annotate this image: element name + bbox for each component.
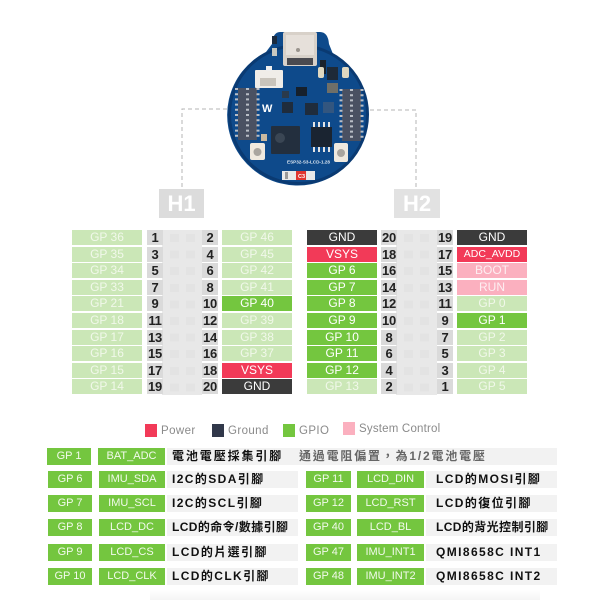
right pin numbers: 10 [203,296,217,311]
left pin numbers: 5 [151,263,159,278]
left pin header [236,88,258,140]
battery connector [255,66,283,88]
row: GP 7 [48,495,298,512]
right pin numbers: 5 [441,346,449,361]
right signal column: GP 42 [240,263,274,277]
row: GP 12 [306,495,557,512]
c3 marking: C3 [298,174,305,180]
small components [261,36,349,141]
right signal column: GP 40 [240,296,274,310]
right pin numbers [202,230,218,394]
right pin numbers: 15 [438,263,452,278]
left signal column: VSYS [326,247,358,261]
left pin numbers: 6 [385,346,393,361]
left pin numbers: 11 [148,313,162,328]
center connector strip [396,230,437,395]
esp32 chip [271,126,300,154]
center connector strip [162,230,202,395]
row: GP 40 [306,519,557,536]
left signal column [72,230,142,394]
right signal column: GP 46 [240,230,274,244]
right pin numbers: 18 [203,363,217,378]
left pin numbers: 2 [385,379,393,394]
right pin numbers: 4 [206,247,214,262]
left pin numbers [381,230,397,394]
right pin header [341,89,362,141]
row: GP 40: LCD_BL [370,521,411,533]
row: GP 10 [48,568,298,585]
right signal column: GP 4 [478,363,506,377]
left signal column: GP 6 [328,263,356,277]
row: GP 6: IMU_SDA [108,473,156,485]
right pin numbers: 17 [438,247,452,262]
right signal column: GND [479,230,505,244]
legend: power: Power [161,425,196,437]
row: GP 8: GP 8 [58,521,82,533]
left pin numbers: 4 [385,363,393,378]
right pin numbers: 14 [203,330,217,345]
left pin numbers: 17 [148,363,162,378]
row: GP 11: LCD_DIN [367,473,414,485]
row: GP 8: LCD的命令/數據引腳 [172,520,288,534]
right signal column: GP 5 [478,379,506,393]
row: GP 7: GP 7 [58,497,82,509]
left signal column [307,230,377,394]
board name: ESP32-S3-LCD-1.28 [287,160,330,164]
row: GP 40: LCD的背光控制引腳 [436,520,549,534]
row: GP 9: LCD的片選引腳 [172,545,268,559]
right button [334,143,348,162]
left pin numbers: 12 [382,296,396,311]
left signal column: GND [329,230,355,244]
row: GP 12: LCD_RST [365,497,416,509]
left button [250,143,265,160]
right signal column: GND [244,379,270,393]
right signal column: GP 38 [240,330,274,344]
left pin numbers: 10 [382,313,396,328]
H2 label: H2 [403,191,431,216]
right signal column: GP 41 [240,280,274,294]
left pin numbers: 8 [385,330,393,345]
row: GP 10: LCD的CLK引腳 [172,569,270,583]
right pin numbers: 8 [206,280,214,295]
H1 label: H1 [167,191,196,216]
c3 marking [282,171,315,180]
right pin numbers: 12 [203,313,217,328]
row: GP 47 [306,544,557,561]
H2 label [394,189,440,218]
left pin numbers: 16 [382,263,396,278]
row: GP 12: LCD的復位引腳 [436,496,532,510]
row: GP 48: IMU_INT2 [365,570,416,582]
row: GP 6: I2C的SDA引腳 [172,472,265,486]
right signal column [222,230,292,394]
left pin numbers [147,230,163,394]
left pin numbers: 13 [148,330,162,345]
left pin numbers: 7 [151,280,159,295]
left signal column: GP 13 [325,379,359,393]
legend: gpio [283,424,329,437]
legend [145,422,440,437]
right pin numbers: 16 [203,346,217,361]
left signal column: GP 36 [90,230,124,244]
row: GP 1 battery ADC: 電池電壓採集引腳 [172,449,283,463]
row: GP 8 [48,519,298,536]
right signal column [457,230,527,394]
right pin numbers: 1 [441,379,449,394]
right pin numbers: 9 [441,313,449,328]
left signal column: GP 33 [90,280,124,294]
left pin numbers: 18 [382,247,396,262]
row: GP 40: GP 40 [313,521,344,533]
row: GP 47: GP 47 [313,546,344,558]
row: GP 6: GP 6 [58,473,82,485]
left signal column: GP 14 [90,379,124,393]
row: GP 12: GP 12 [313,497,344,509]
left pin numbers: 3 [151,247,159,262]
right signal column: ADC_AVDD [464,248,520,260]
bottom shadow [150,590,540,600]
legend: ground: Ground [228,425,269,437]
left pin numbers: 1 [151,230,159,245]
left signal column: GP 9 [328,313,356,327]
pin table H1 [72,230,292,395]
row: GP 47: QMI8658C INT1 [436,545,542,559]
right signal column: GP 3 [478,346,506,360]
row: GP 1 battery ADC: 通過電阻偏置，為1/2電池電壓 [299,449,487,463]
left signal column: GP 34 [90,263,124,277]
right signal column: GP 37 [240,346,274,360]
right signal column: GP 0 [478,296,506,310]
right signal column: BOOT [475,263,509,277]
left signal column: GP 12 [325,363,359,377]
right signal column: GP 39 [240,313,274,327]
usb-c connector [283,32,317,66]
left signal column: GP 18 [90,313,124,327]
left signal column: GP 8 [328,296,356,310]
row: GP 9 [48,544,298,561]
row: GP 9: LCD_CS [110,546,154,558]
row: GP 48 [306,568,557,585]
right pin numbers: 6 [206,263,214,278]
legend: gpio: GPIO [299,425,329,437]
left pin numbers: 14 [382,280,396,295]
row: GP 1 battery ADC: BAT_ADC [107,450,156,462]
H1 label [159,189,204,218]
left pin numbers: 9 [151,296,159,311]
left signal column: GP 16 [90,346,124,360]
left signal column: GP 10 [325,330,359,344]
left pin numbers: 15 [148,346,162,361]
right pin numbers: 3 [441,363,449,378]
row: GP 10: LCD_CLK [107,570,157,582]
legend: ground [212,424,269,437]
row: GP 48: GP 48 [313,570,344,582]
right pin numbers: 19 [438,230,452,245]
right pin numbers [437,230,453,394]
right pin numbers: 13 [438,280,452,295]
row: GP 11: LCD的MOSI引腳 [436,472,541,486]
row: GP 8: LCD_DC [110,521,154,533]
right signal column: VSYS [241,363,273,377]
row: GP 9: GP 9 [58,546,82,558]
right pin numbers: 11 [438,296,452,311]
flash chip [311,122,332,152]
logo: W [262,103,273,115]
left pin numbers: 19 [148,379,162,394]
right signal column: GP 1 [478,313,506,327]
row: GP 6 [48,471,298,488]
right signal column: GP 45 [240,247,274,261]
row: GP 1 battery ADC: GP 1 [57,450,81,462]
right signal column: GP 2 [478,330,506,344]
right pin numbers: 2 [206,230,214,245]
left signal column: GP 7 [328,280,356,294]
left signal column: GP 35 [90,247,124,261]
row: GP 7: IMU_SCL [108,497,156,509]
left signal column: GP 21 [90,296,124,310]
left signal column: GP 11 [326,346,358,360]
row: GP 47: IMU_INT1 [365,546,416,558]
legend: power [145,424,196,437]
legend: system control: System Control [359,423,440,435]
row: GP 7: I2C的SCL引腳 [172,496,263,510]
pin table H2 [307,230,527,395]
left signal column: GP 15 [90,363,124,377]
row: GP 11: GP 11 [313,473,344,485]
pcb body [227,32,368,185]
left pin numbers: 20 [382,230,396,245]
row: GP 1 battery ADC [47,448,557,465]
row: GP 10: GP 10 [54,570,86,582]
right pin numbers: 20 [203,379,217,394]
row: GP 48: QMI8658C INT2 [436,569,542,583]
right pin numbers: 7 [441,330,449,345]
right signal column: RUN [479,280,505,294]
row: GP 11 [306,471,557,488]
board illustration [227,32,369,186]
left signal column: GP 17 [90,330,124,344]
